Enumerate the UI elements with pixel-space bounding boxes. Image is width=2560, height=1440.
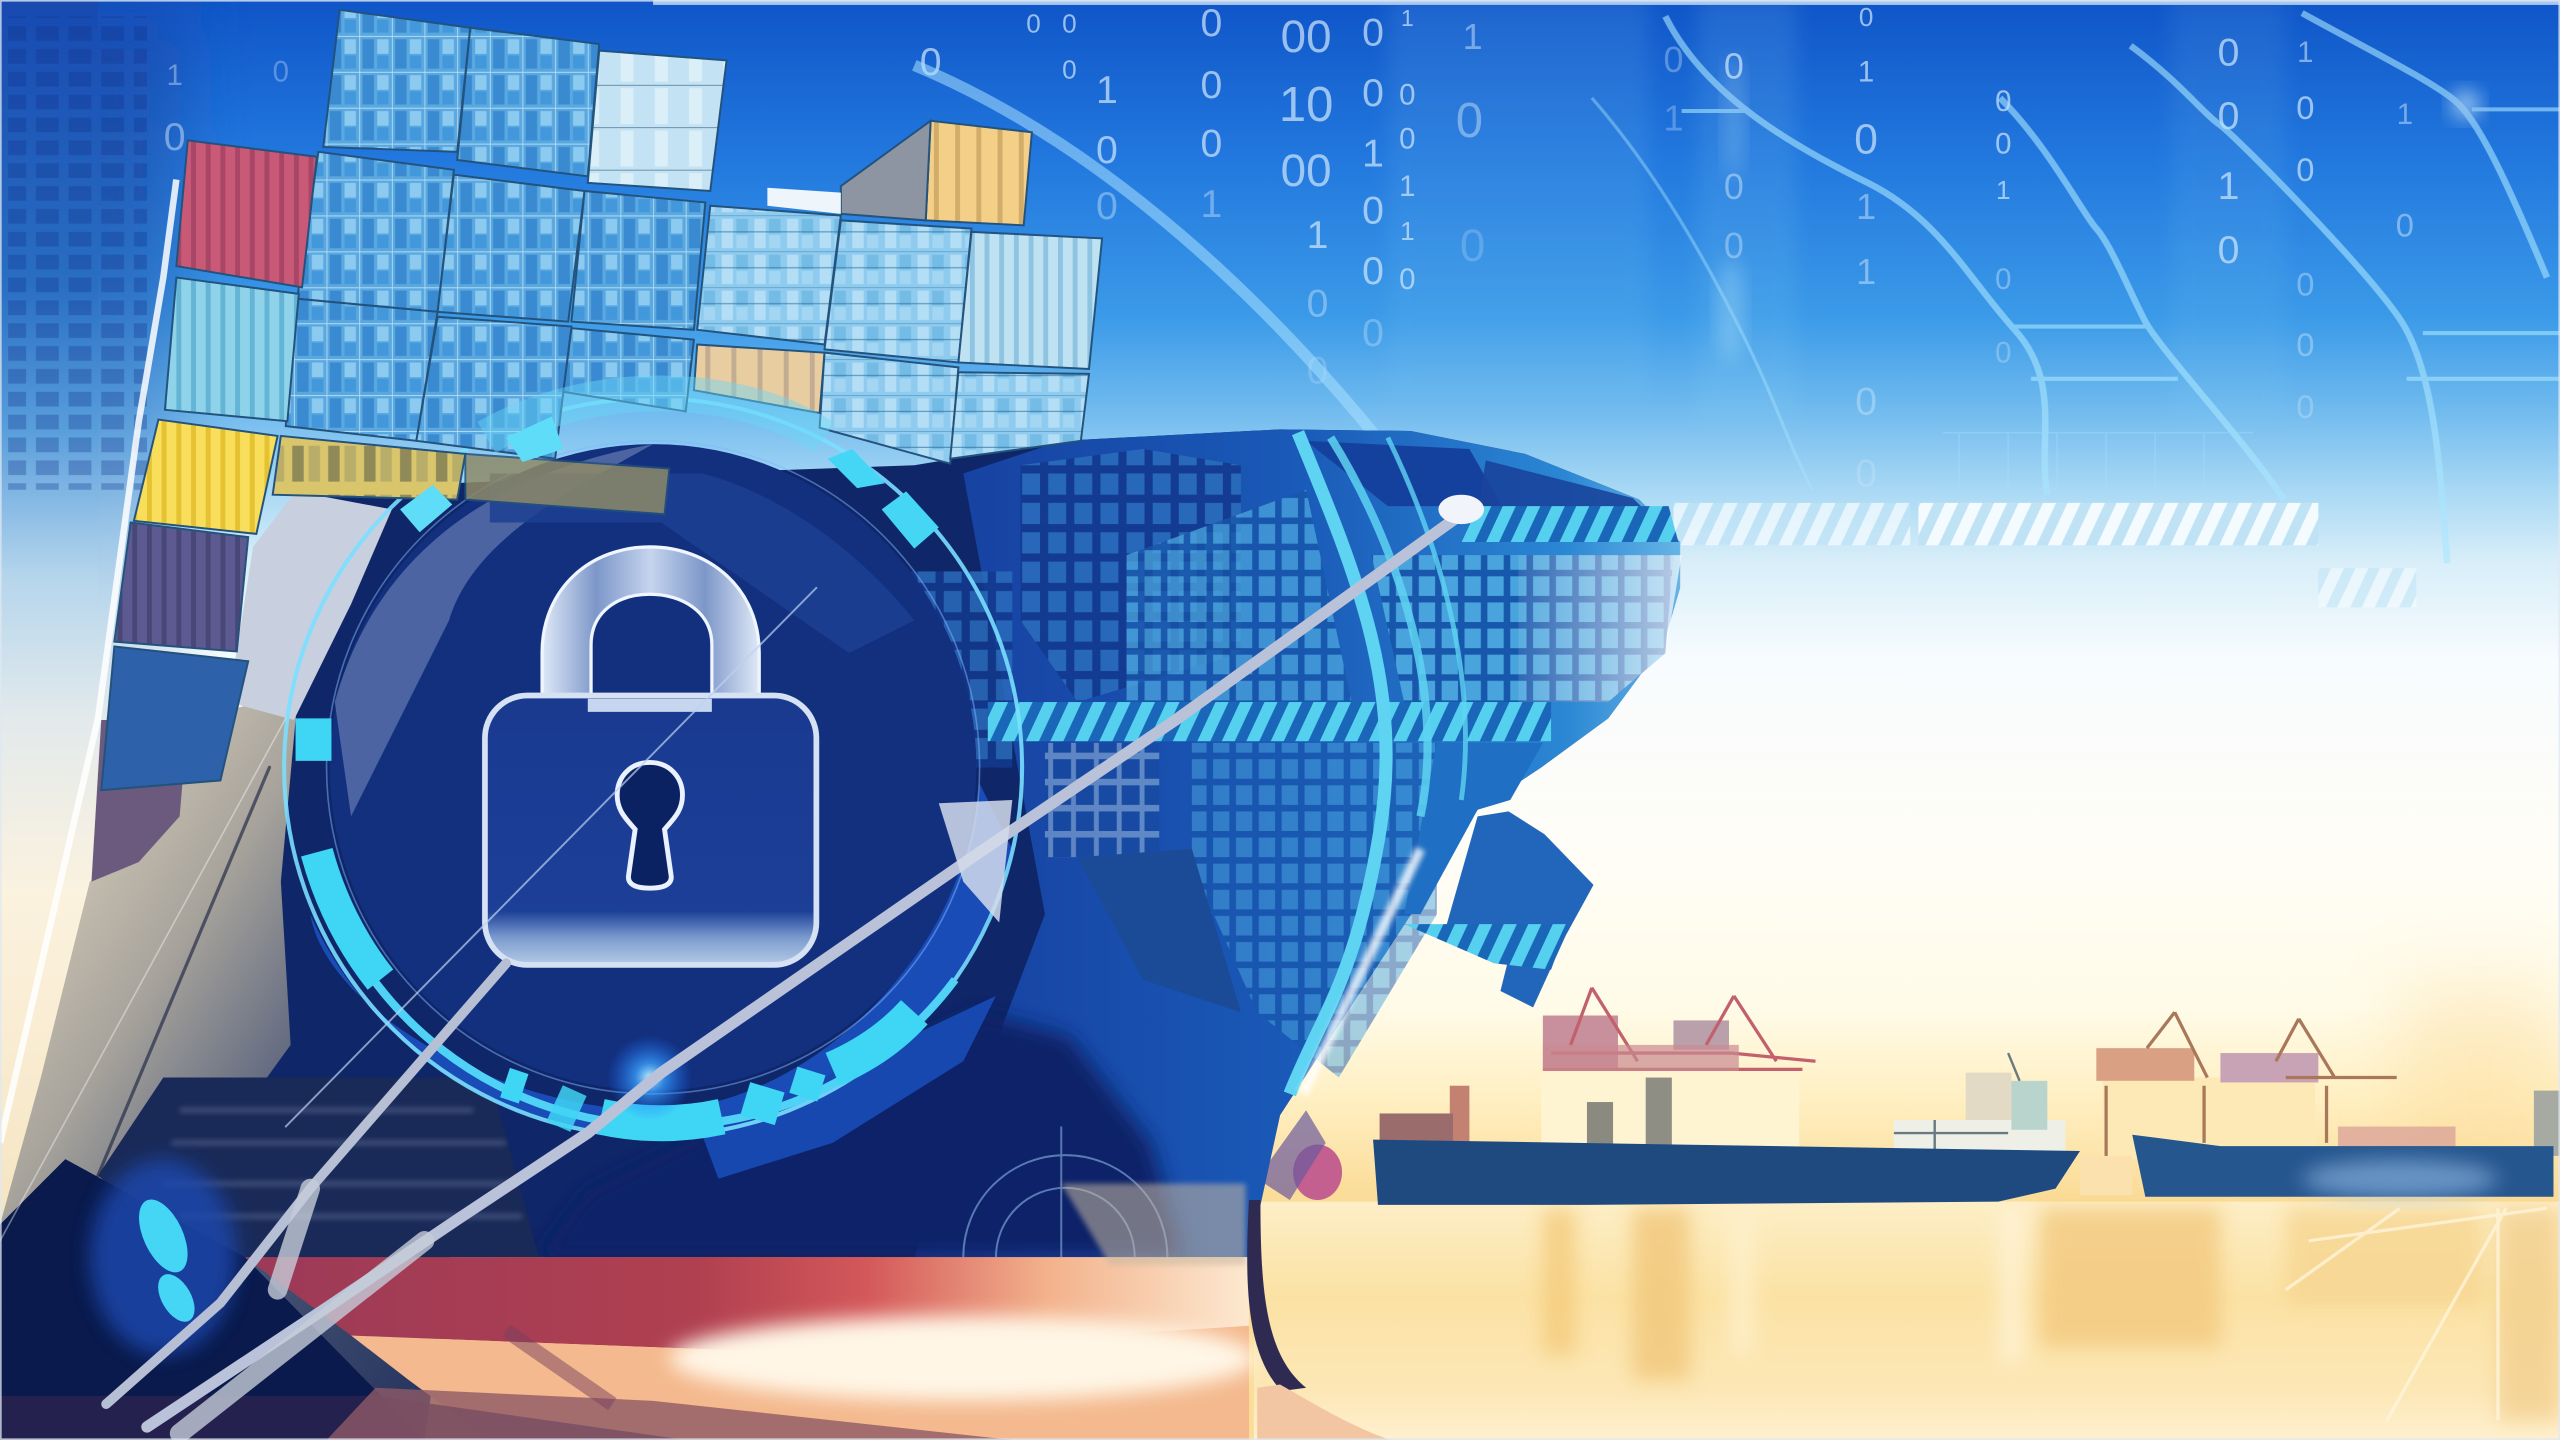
binary digit rain: 0 <box>1201 123 1222 166</box>
binary digit rain: 0 <box>1062 54 1077 84</box>
binary digit rain: 0 <box>1663 39 1683 80</box>
binary digit rain: 0 <box>1399 78 1416 111</box>
binary digit rain <box>164 2 2414 496</box>
binary digit rain: 0 <box>273 56 289 89</box>
binary digit rain: 0 <box>1995 127 2011 160</box>
binary digit rain: 1 <box>2297 36 2313 69</box>
binary digit rain: 0 <box>1724 225 1744 266</box>
mooring ropes <box>0 495 1484 1433</box>
binary digit rain: 1 <box>1399 170 1416 203</box>
binary digit rain: 0 <box>2296 266 2314 303</box>
binary digit rain: 0 <box>1854 115 1878 162</box>
binary digit rain: 0 <box>2396 207 2414 244</box>
binary digit rain: 0 <box>2296 388 2314 425</box>
inner navy disc <box>330 444 976 1091</box>
crane group right <box>2096 1012 2456 1192</box>
binary digit rain: 0 <box>1362 312 1384 355</box>
binary digit rain: 0 <box>1362 250 1384 293</box>
binary digit rain: 00 <box>1281 145 1332 196</box>
binary digit rain: 0 <box>2296 326 2314 363</box>
binary digit rain: 0 <box>1399 263 1416 296</box>
binary digit rain: 0 <box>1456 94 1483 148</box>
binary digit rain: 1 <box>1307 214 1328 257</box>
keyhole <box>617 762 682 888</box>
harbour water <box>1254 1202 2560 1440</box>
binary digit rain: 1 <box>1201 183 1222 226</box>
binary digit rain: 0 <box>1995 336 2011 369</box>
binary digit rain: 0 <box>2296 89 2314 126</box>
binary digit rain: 0 <box>2218 95 2239 138</box>
binary digit rain: 0 <box>1026 9 1041 39</box>
binary digit rain: 0 <box>1855 453 1877 496</box>
binary digit rain: 1 <box>1856 186 1876 227</box>
bow hatch bands <box>988 506 1678 970</box>
brick coloured patch behind stern <box>91 720 188 882</box>
rope one <box>147 514 1461 1427</box>
ship hull <box>0 429 1680 1440</box>
moored ship hulls <box>1373 1135 2553 1205</box>
binary digit rain: 00 <box>1281 11 1332 62</box>
bow window grids <box>849 441 1682 1078</box>
cyan curved structural bands <box>1290 433 1465 1094</box>
binary digit rain: 0 <box>1062 9 1077 39</box>
binary digit rain: 1 <box>1401 5 1414 31</box>
dial arc and cyan diamonds over containers <box>400 393 939 549</box>
pale hatch band extending from the bow <box>1673 503 2416 607</box>
binary digit rain: 1 <box>1362 133 1384 176</box>
binary digit rain: 1 <box>2397 98 2413 131</box>
binary digit rain: 1 <box>1400 216 1415 246</box>
hull silver stern quarter <box>0 686 490 1440</box>
binary digit rain: 0 <box>1362 190 1384 233</box>
binary digit rain: 0 <box>1859 2 1873 32</box>
distant port: cranes, buildings and moored ships <box>1257 988 2560 1205</box>
bow blue field <box>914 429 1680 1257</box>
skyline <box>1380 1086 2560 1156</box>
crane group left <box>1541 988 1816 1151</box>
binary digit rain: 0 <box>1096 129 1118 172</box>
binary digit rain: 10 <box>1279 78 1333 132</box>
binary digit rain: 0 <box>1096 185 1118 228</box>
binary digit rain: 0 <box>1460 220 1485 271</box>
binary digit rain: 0 <box>2218 31 2239 74</box>
binary digit rain: 0 <box>1201 2 1222 45</box>
large arc over containers <box>914 65 1380 441</box>
binary digit rain: 1 <box>167 59 183 92</box>
lock body <box>485 696 816 965</box>
binary digit rain: 1 <box>1096 69 1118 112</box>
binary digit rain: 0 <box>1362 72 1384 115</box>
cyan hull glow streaks lower left <box>129 1192 202 1328</box>
bow stem and waterline <box>1247 1200 1391 1440</box>
binary digit rain: 0 <box>1399 123 1416 156</box>
binary digit rain: 0 <box>2296 151 2314 188</box>
binary digit rain: 0 <box>1995 85 2011 118</box>
padlock icon <box>485 547 816 965</box>
hull dark body <box>196 429 1680 1257</box>
fairlead fitting on hull <box>939 800 1012 922</box>
binary digit rain: 0 <box>1724 166 1744 207</box>
red boot-top of hull <box>0 1184 1257 1440</box>
lock shackle <box>542 547 759 702</box>
security dial ring around the lock <box>284 398 1022 1179</box>
binary digit rain: 0 <box>1724 45 1744 86</box>
binary digit rain: 0 <box>164 116 186 159</box>
binary digit rain: 0 <box>1201 64 1222 107</box>
binary digit rain: 0 <box>920 41 942 84</box>
rope two <box>106 963 506 1404</box>
binary digit rain: 1 <box>1463 16 1483 57</box>
binary digit rain: 1 <box>1856 251 1876 292</box>
binary digit rain: 1 <box>1663 98 1683 139</box>
binary digit rain: 1 <box>1858 56 1874 89</box>
rope tip fitting <box>1438 495 1484 524</box>
binary digit rain: 0 <box>1855 381 1877 424</box>
binary digit rain: 0 <box>1995 263 2011 296</box>
cyan segments <box>313 718 914 1127</box>
deck grey wedge <box>229 491 392 720</box>
circuit traces upper right <box>1592 13 2560 563</box>
outer blue band <box>310 784 1012 1135</box>
binary digit rain: 0 <box>2218 229 2239 272</box>
binary digit rain: 0 <box>1307 283 1328 326</box>
binary digit rain: 0 <box>1362 12 1384 55</box>
rope wrap flower <box>1257 1110 1342 1200</box>
binary digit rain: 1 <box>2218 165 2239 208</box>
ring outlines <box>284 398 1022 1136</box>
gauge circle lines on lower bow <box>963 1127 1167 1257</box>
bow dark lower <box>539 1012 1184 1257</box>
stacked cargo containers <box>0 10 1102 1143</box>
lower stern streaks <box>98 1078 539 1257</box>
binary digit rain: 1 <box>1996 175 2011 205</box>
binary digit rain: 0 <box>1307 350 1328 393</box>
mid ship superstructure <box>1894 1053 2065 1162</box>
